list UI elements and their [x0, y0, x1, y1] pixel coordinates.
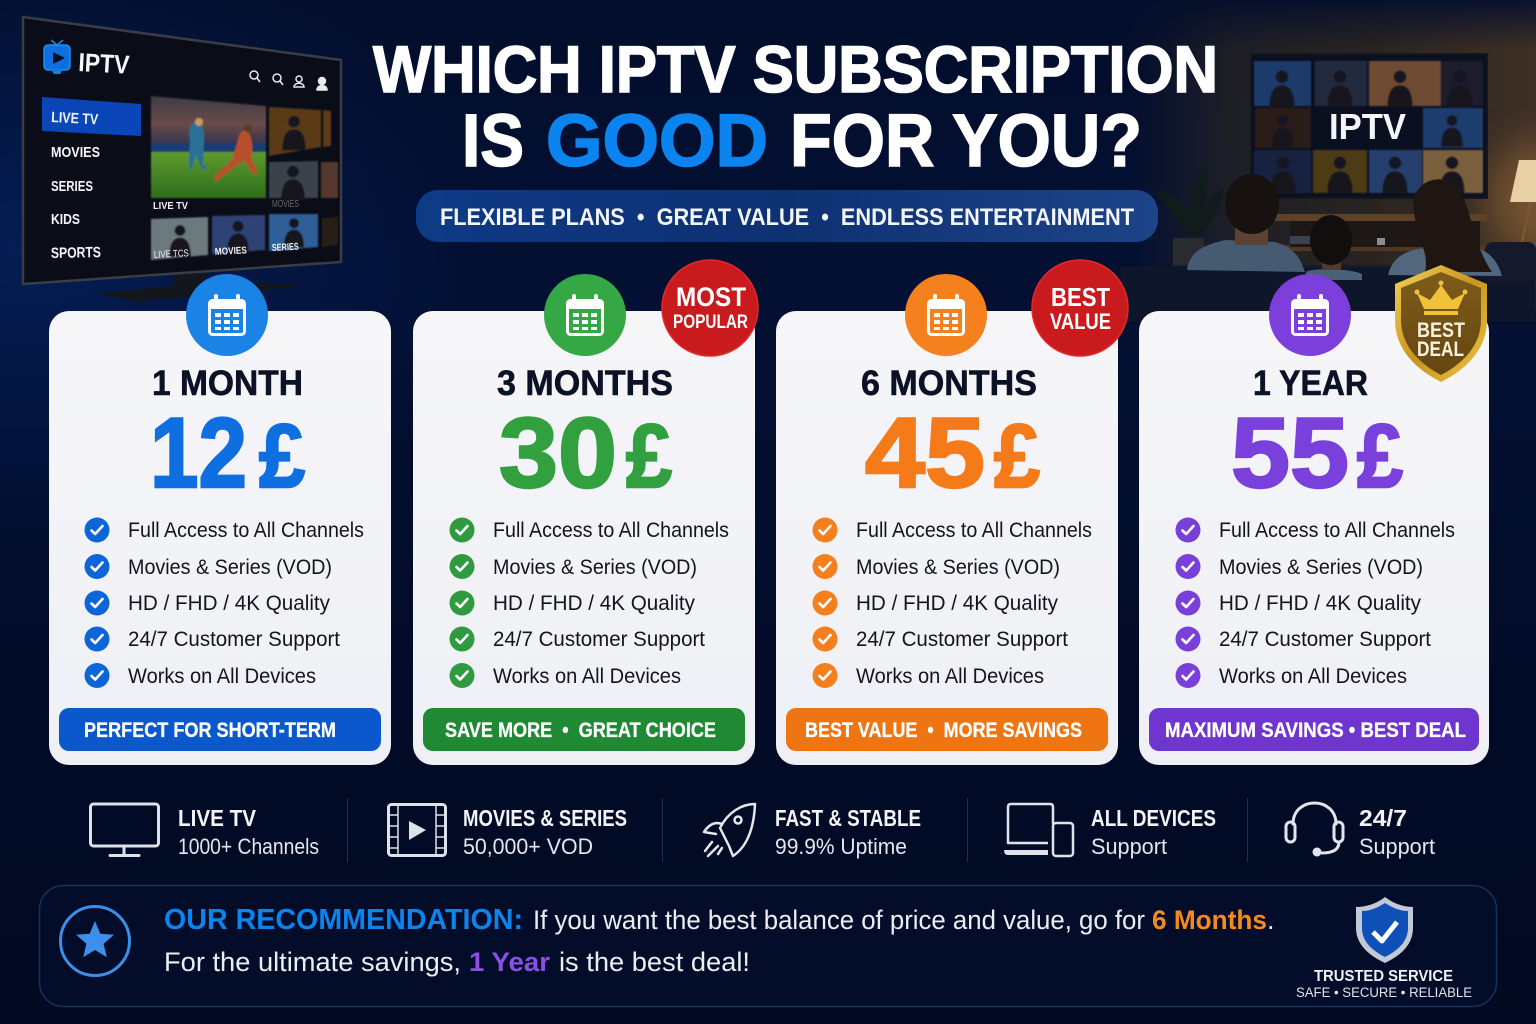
feature list: 24/7 Customer Support	[1219, 628, 1431, 651]
feature: movies and series	[388, 804, 627, 859]
feature list: Full Access to All Channels	[493, 519, 729, 542]
feature: all devices	[1004, 804, 1216, 859]
plan name: 3 MONTHS	[497, 364, 673, 403]
feature list: Full Access to All Channels	[856, 519, 1092, 542]
feature list: 24/7 Customer Support	[128, 628, 340, 651]
left TV with IPTV app	[23, 17, 341, 302]
feature list	[1176, 518, 1455, 688]
title: IS	[462, 99, 524, 182]
subtitle pill	[416, 190, 1158, 242]
sofa	[1120, 242, 1536, 322]
TV screen	[23, 17, 341, 284]
featured football image	[151, 96, 266, 198]
panel: 3 months plan	[413, 274, 755, 765]
bottom thumbnails	[151, 214, 338, 261]
feature: movies and series: 50,000+ VOD	[463, 834, 593, 859]
bottom thumbnails: LIVE TCS	[154, 248, 189, 261]
icon: calendar purple	[1269, 274, 1351, 356]
sidebar menu: SPORTS	[51, 244, 101, 262]
feature list: Movies & Series (VOD)	[493, 556, 697, 579]
feature list: Full Access to All Channels	[1219, 519, 1455, 542]
feature: all devices: ALL DEVICES	[1091, 805, 1216, 831]
price: £	[994, 407, 1040, 507]
call to action: SAVE MORE • GREAT CHOICE	[445, 719, 716, 742]
sidebar menu: LIVE TV	[51, 109, 99, 128]
feature list: Works on All Devices	[1219, 665, 1407, 688]
recommendation panel	[40, 886, 1496, 1006]
feature: support: 24/7	[1359, 805, 1407, 831]
icon: calendar blue	[186, 274, 268, 356]
icon: calendar orange	[905, 274, 987, 356]
badge: best deal shield: BEST	[1417, 319, 1465, 342]
feature: movies and series: MOVIES & SERIES	[463, 805, 627, 831]
recommendation text: .	[1267, 905, 1275, 935]
recommendation text: If you want the best balance of price and value, go for	[533, 905, 1145, 935]
title: WHICH IPTV SUBSCRIPTION	[373, 32, 1218, 106]
feature list	[84, 518, 364, 688]
price	[499, 397, 672, 508]
feature: live tv: LIVE TV	[178, 805, 257, 831]
badge: most popular: MOST	[676, 282, 746, 312]
price: 55	[1231, 397, 1349, 508]
feature: all devices: Support	[1091, 834, 1167, 859]
title: GOOD	[546, 99, 768, 182]
panel: 1 month plan	[49, 274, 391, 765]
side thumbnails: MOVIES	[272, 199, 299, 210]
price: £	[259, 407, 305, 507]
plant	[1158, 165, 1224, 266]
trusted service shield: TRUSTED SERVICE	[1314, 968, 1453, 985]
panel: 6 months plan	[776, 274, 1118, 765]
feature list: Works on All Devices	[856, 665, 1044, 688]
call to action	[423, 708, 745, 751]
call to action: PERFECT FOR SHORT-TERM	[84, 719, 336, 742]
price: £	[626, 407, 672, 507]
feature list: HD / FHD / 4K Quality	[856, 592, 1058, 615]
feature list: Movies & Series (VOD)	[128, 556, 332, 579]
feature list: HD / FHD / 4K Quality	[493, 592, 695, 615]
feature list: Movies & Series (VOD)	[1219, 556, 1423, 579]
feature: fast and stable	[704, 804, 921, 859]
call to action: BEST VALUE • MORE SAVINGS	[805, 719, 1082, 742]
plan name: 1 YEAR	[1253, 364, 1368, 403]
plan name: 1 MONTH	[152, 364, 303, 403]
sidebar menu	[42, 97, 141, 262]
feature list: Works on All Devices	[128, 665, 316, 688]
featured caption: LIVE TV	[153, 200, 188, 212]
badge: best value: BEST	[1051, 282, 1110, 312]
icon: calendar green	[544, 274, 626, 356]
price: £	[1357, 407, 1403, 507]
wall TV	[1251, 54, 1487, 198]
shelf	[1268, 214, 1493, 251]
features strip	[90, 798, 1435, 862]
bottom thumbnails: MOVIES	[215, 245, 247, 258]
app logo icon	[44, 40, 70, 74]
feature list	[812, 518, 1092, 688]
price: 45	[865, 397, 985, 508]
feature list	[450, 518, 729, 688]
panel: 1 year plan	[1139, 274, 1489, 765]
lamp	[1510, 160, 1536, 248]
feature list: Works on All Devices	[493, 665, 681, 688]
badge: best value: VALUE	[1050, 309, 1111, 334]
trusted service shield	[1296, 897, 1472, 1000]
sidebar menu: SERIES	[51, 178, 93, 195]
TV stand	[97, 272, 295, 302]
icon: crown	[1414, 280, 1468, 315]
sidebar menu: KIDS	[51, 211, 80, 228]
price	[865, 397, 1040, 508]
feature list: Full Access to All Channels	[128, 519, 364, 542]
side thumbnails	[269, 107, 338, 210]
search and profile icons	[250, 71, 327, 90]
feature list: HD / FHD / 4K Quality	[128, 592, 330, 615]
feature: live tv: 1000+ Channels	[178, 834, 319, 859]
call to action: MAXIMUM SAVINGS • BEST DEAL	[1165, 719, 1466, 742]
price: 30	[499, 397, 617, 508]
feature: fast and stable: 99.9% Uptime	[775, 834, 907, 859]
icon: star	[60, 906, 130, 976]
recommendation text	[164, 904, 1275, 977]
feature list: HD / FHD / 4K Quality	[1219, 592, 1421, 615]
app logo text: IPTV	[78, 47, 131, 80]
plan name: 6 MONTHS	[861, 364, 1037, 403]
badge: best value	[1032, 260, 1128, 356]
feature: live tv	[90, 804, 319, 859]
title	[373, 32, 1218, 182]
feature: support: Support	[1359, 834, 1435, 859]
feature list: Movies & Series (VOD)	[856, 556, 1060, 579]
badge: most popular	[662, 260, 758, 356]
call to action	[786, 708, 1108, 751]
recommendation text: For the ultimate savings,	[164, 947, 461, 977]
feature: fast and stable: FAST & STABLE	[775, 805, 921, 831]
living room scene	[1120, 0, 1536, 322]
call to action	[59, 708, 381, 751]
wall TV logo text: IPTV	[1329, 106, 1406, 147]
trusted service shield: SAFE • SECURE • RELIABLE	[1296, 985, 1472, 1000]
badge: best deal shield	[1395, 265, 1487, 382]
sidebar menu: MOVIES	[51, 144, 100, 161]
price: 12	[150, 397, 247, 508]
family silhouettes	[1187, 174, 1502, 280]
recommendation text: 1 Year	[469, 947, 550, 977]
recommendation text: is the best deal!	[559, 947, 750, 977]
bottom thumbnails: SERIES	[272, 242, 299, 254]
title: FOR YOU?	[790, 99, 1142, 182]
recommendation text: OUR RECOMMENDATION:	[164, 904, 523, 936]
subtitle pill: FLEXIBLE PLANS • GREAT VALUE • ENDLESS ENTERTAINMENT	[440, 204, 1134, 231]
feature list: 24/7 Customer Support	[856, 628, 1068, 651]
feature: support	[1286, 803, 1435, 859]
call to action	[1149, 708, 1479, 751]
feature list: 24/7 Customer Support	[493, 628, 705, 651]
price	[1231, 397, 1403, 508]
recommendation text: 6 Months	[1152, 905, 1267, 935]
badge: most popular: POPULAR	[673, 312, 748, 333]
badge: best deal shield: DEAL	[1417, 338, 1464, 361]
